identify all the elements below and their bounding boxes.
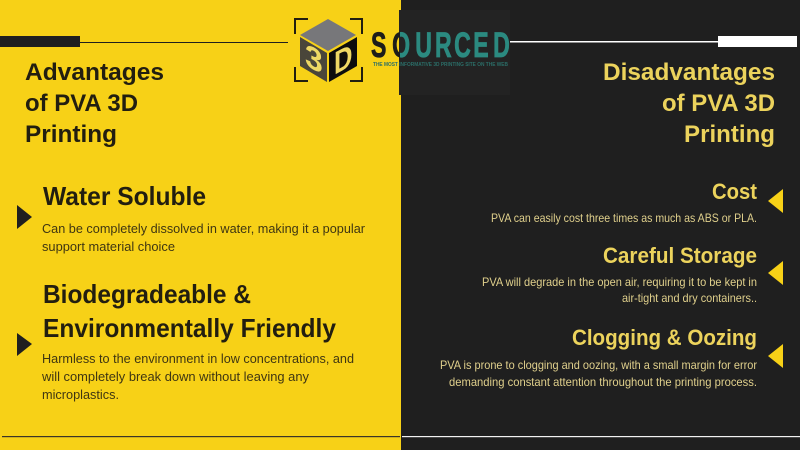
advantage: biodegradeable: will completely break down without leaving any: [41, 370, 310, 384]
advantage: biodegradeable: Harmless to the environment in low concentrations, and: [42, 352, 354, 366]
top right bar: [510, 36, 797, 47]
disadvantage: careful storage: air-tight and dry containers..: [622, 291, 757, 305]
logo: 3D Sourced: SOURCED: [371, 26, 510, 65]
disadvantage: clogging and oozing: PVA is prone to clogging and oozing, with a small margin for error: [440, 358, 757, 372]
logo: 3D Sourced: THE MOST INFORMATIVE 3D PRINTING SITE ON THE WEB: [373, 62, 508, 68]
advantage: water soluble: Water Soluble: [43, 181, 206, 211]
logo: 3D Sourced: D: [334, 37, 352, 82]
disadvantage: careful storage: Careful Storage: [603, 243, 757, 268]
panel: disadvantages background: [401, 0, 800, 450]
disadvantage: cost: Cost: [712, 179, 758, 204]
disadvantage: careful storage: [482, 243, 783, 305]
advantage: biodegradeable: Environmentally Friendly: [43, 313, 336, 343]
advantage: water soluble: [17, 181, 365, 254]
heading: disadvantages: of PVA 3D: [662, 90, 775, 117]
advantage: biodegradeable: Biodegradeable &: [43, 279, 251, 309]
heading: disadvantages: Disadvantages: [603, 59, 775, 86]
heading: disadvantages: [603, 59, 775, 148]
heading: advantages: Advantages: [25, 59, 164, 86]
heading: advantages: [25, 59, 164, 148]
logo: 3D Sourced: [295, 10, 510, 95]
heading: advantages: Printing: [25, 121, 117, 148]
disadvantage: cost: [491, 179, 783, 225]
advantage: water soluble: Can be completely dissolved in water, making it a popular: [42, 222, 365, 236]
logo: 3D Sourced: 3: [305, 37, 323, 82]
panel: advantages background: [0, 0, 401, 450]
advantage: water soluble: support material choice: [42, 240, 175, 254]
disadvantage: clogging and oozing: demanding constant attention throughout the printing process.: [449, 375, 757, 389]
disadvantage: clogging and oozing: Clogging & Oozing: [572, 325, 757, 350]
advantage: biodegradeable: microplastics.: [42, 388, 119, 402]
advantage: biodegradeable: [17, 279, 354, 402]
heading: disadvantages: Printing: [684, 121, 775, 148]
disadvantage: clogging and oozing: [440, 325, 783, 389]
disadvantage: careful storage: PVA will degrade in the open air, requiring it to be kept in: [482, 275, 757, 289]
top left bar: [0, 36, 288, 47]
disadvantage: cost: PVA can easily cost three times as much as ABS or PLA.: [491, 211, 757, 225]
heading: advantages: of PVA 3D: [25, 90, 138, 117]
